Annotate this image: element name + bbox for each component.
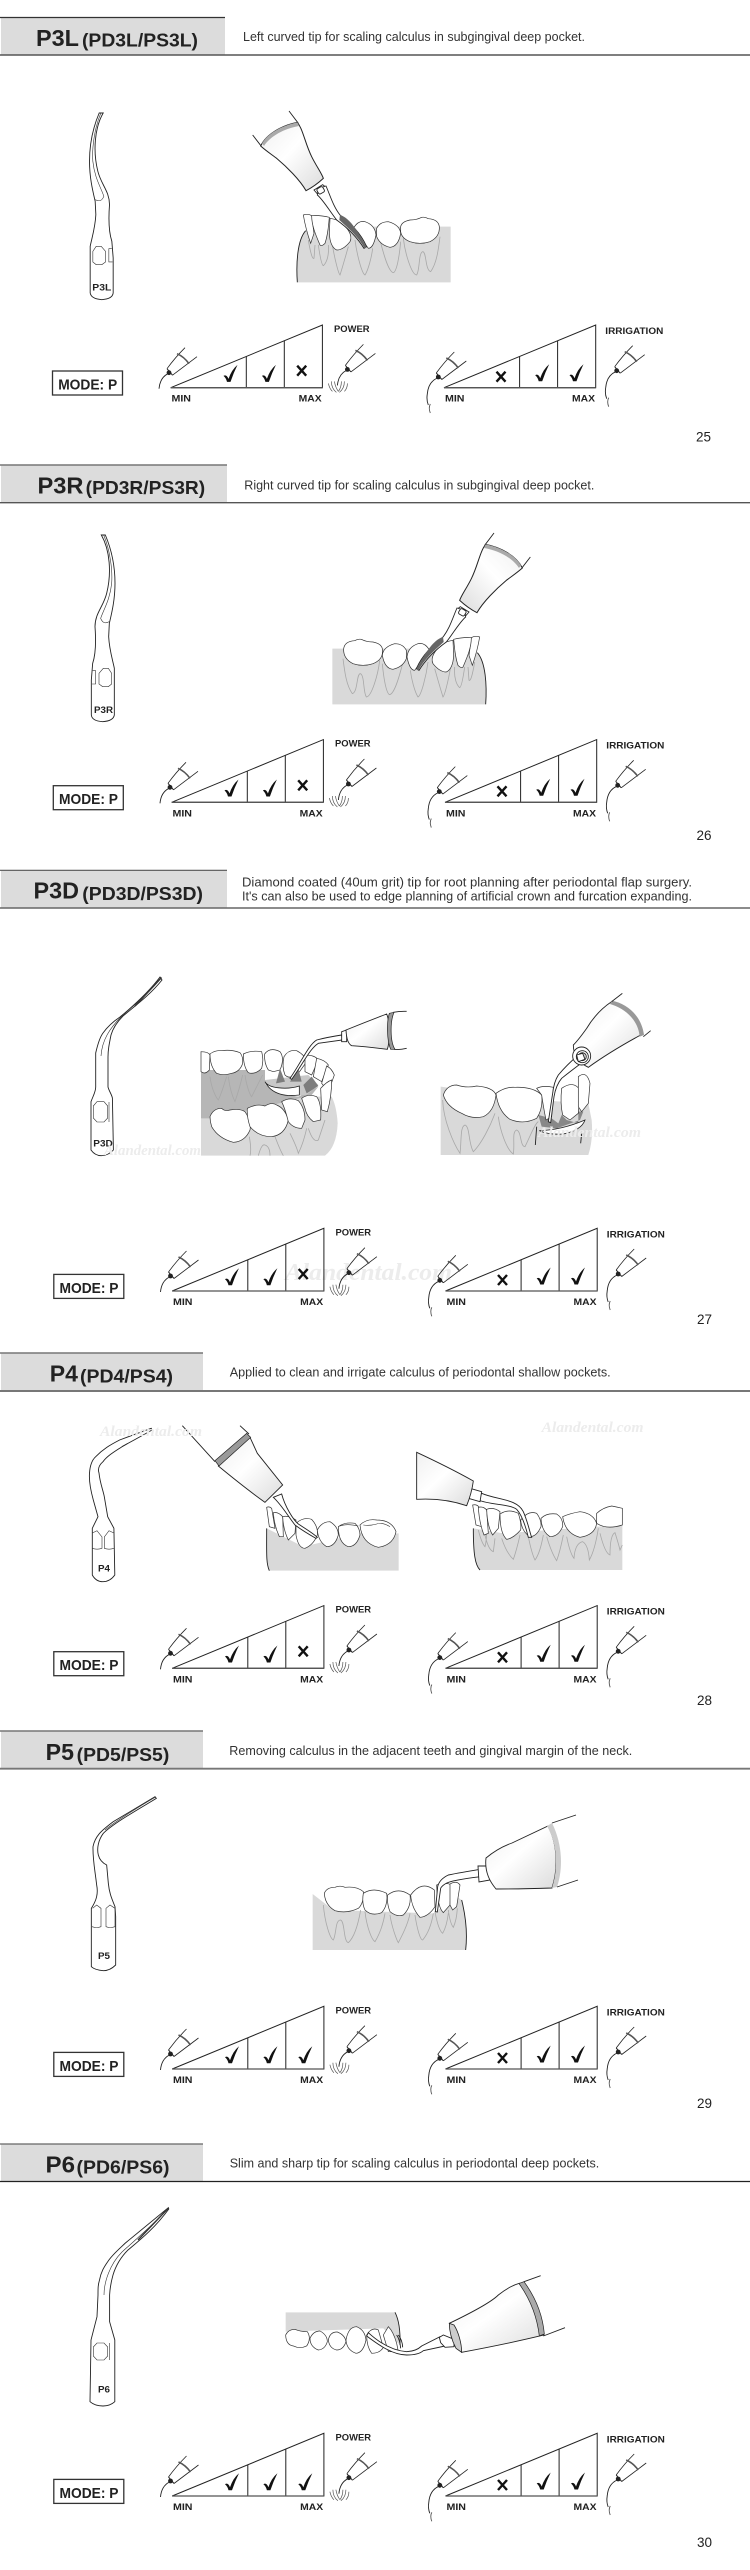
description: P3D: Diamond coated (40um grit) tip for root planning after periodontal flap surgery. <box>242 875 692 890</box>
power meter <box>160 1605 377 1685</box>
watermarks: Alandental.com <box>537 1125 641 1141</box>
header bar: P5: (PD5/PS5) <box>77 1744 169 1765</box>
power meter <box>159 324 375 405</box>
page number: 28 <box>697 1693 712 1708</box>
page number: 30 <box>697 2535 712 2550</box>
power meter: MIN <box>173 1674 193 1685</box>
irrigation meter: MIN <box>446 1297 466 1308</box>
tip drawing: P3D: P3D <box>93 1139 113 1149</box>
header bar: P4: (PD4/PS4) <box>80 1366 173 1386</box>
power meter: MAX <box>300 808 323 820</box>
irrigation meter: MAX <box>573 808 597 820</box>
power meter: MAX <box>300 2075 324 2086</box>
watermarks <box>99 1420 644 1440</box>
tip drawing: P3L <box>90 113 113 300</box>
description: P5: Removing calculus in the adjacent teeth and gingival margin of the neck. <box>229 1743 632 1758</box>
irrigation meter <box>428 2006 665 2094</box>
tip drawing: P6: P6 <box>98 2384 110 2394</box>
power meter: MIN <box>172 808 192 820</box>
irrigation meter <box>428 1606 665 1694</box>
header bar: P3R: P3R <box>38 472 84 498</box>
section: P3R <box>0 465 750 843</box>
tip drawing: P3R <box>91 535 115 722</box>
section: P5 <box>0 1731 750 2111</box>
power meter: MAX <box>300 1674 324 1685</box>
page number: 26 <box>696 828 712 843</box>
illustration: side handpiece with teeth <box>417 1452 622 1570</box>
page number: 27 <box>697 1312 712 1327</box>
irrigation meter <box>428 1228 665 1316</box>
power meter: MIN <box>172 394 191 405</box>
power meter <box>160 2005 377 2086</box>
description: P4: Applied to clean and irrigate calculus of periodontal shallow pockets. <box>230 1365 611 1380</box>
mode label <box>54 2052 124 2076</box>
mode label: MODE: P <box>60 2485 118 2502</box>
description: P3D <box>242 875 692 904</box>
irrigation meter: IRRIGATION <box>605 326 663 337</box>
irrigation meter: IRRIGATION <box>607 2007 665 2018</box>
mode label: MODE: P <box>60 1657 118 1674</box>
illustration: handpiece at gingival margin <box>313 1815 578 1950</box>
header bar: P5 <box>0 1731 750 1769</box>
irrigation meter: MIN <box>446 1674 466 1685</box>
irrigation meter: IRRIGATION <box>606 741 664 752</box>
power meter <box>160 1227 377 1308</box>
illustration: handpiece scaling left side <box>253 111 451 282</box>
header bar: P3R <box>0 465 750 503</box>
tip drawing: P6 <box>90 2208 169 2406</box>
tip drawing: P4: P4 <box>98 1564 110 1574</box>
section: P6 <box>0 2144 750 2550</box>
header bar: P3R: (PD3R/PS3R) <box>86 477 205 498</box>
irrigation meter: MIN <box>446 808 466 820</box>
irrigation meter: MAX <box>574 2502 597 2513</box>
power meter: MIN <box>173 1297 193 1308</box>
description: P6: Slim and sharp tip for scaling calculus in periodontal deep pockets. <box>230 2155 599 2170</box>
page number: 25 <box>696 430 711 445</box>
illustration: upper teeth with handpiece <box>286 2276 565 2355</box>
header bar: P6: P6 <box>46 2152 75 2178</box>
illustration: occlusal view with handpiece <box>201 1011 407 1156</box>
mode label <box>53 786 123 810</box>
header bar: P3D <box>0 870 750 908</box>
tip drawing: P5 <box>91 1797 156 1971</box>
mode label <box>54 1652 124 1676</box>
irrigation meter: IRRIGATION <box>607 2434 665 2445</box>
header bar: P3D: (PD3D/PS3D) <box>82 883 203 904</box>
irrigation meter: IRRIGATION <box>607 1229 665 1240</box>
header bar: P6 <box>0 2144 750 2182</box>
description: P3R: Right curved tip for scaling calculus in subgingival deep pocket. <box>244 477 594 492</box>
irrigation meter <box>427 325 663 413</box>
description: P3L: Left curved tip for scaling calculus in subgingival deep pocket. <box>243 29 585 44</box>
tip drawing: P4 <box>89 1428 152 1582</box>
mode label: MODE: P <box>58 376 117 394</box>
header bar: P3D: P3D <box>34 877 79 903</box>
mode label: MODE: P <box>60 2058 118 2075</box>
irrigation meter: MIN <box>446 2075 466 2086</box>
irrigation meter: MAX <box>572 394 596 405</box>
header bar: P6: (PD6/PS6) <box>76 2156 170 2178</box>
tip drawing: P5: P5 <box>98 1951 110 1961</box>
power meter <box>160 2432 377 2513</box>
irrigation meter: MAX <box>574 2075 597 2086</box>
tip drawing: P3R: P3R <box>94 705 114 715</box>
illustration: front handpiece with teeth <box>182 1426 399 1571</box>
irrigation meter: MIN <box>445 394 465 405</box>
watermarks: Alandental.com <box>283 1260 452 1286</box>
power meter: POWER <box>336 2432 371 2443</box>
power meter: POWER <box>336 1605 371 1616</box>
irrigation meter: MIN <box>446 2502 466 2513</box>
irrigation meter: MAX <box>574 1297 597 1308</box>
illustration: buccal view with handpiece <box>441 993 651 1155</box>
power meter: POWER <box>336 2005 371 2016</box>
power meter: POWER <box>335 739 371 750</box>
header bar: P3L <box>0 17 750 55</box>
section: P3L <box>0 17 750 445</box>
mode label: MODE: P <box>60 1280 118 1297</box>
mode label: MODE: P <box>59 791 118 808</box>
watermarks: Alandental.com <box>99 1424 202 1440</box>
description: P3D: It's can also be used to edge planning of artificial crown and furcation expanding. <box>242 889 692 904</box>
section: P4 <box>0 1353 750 1708</box>
irrigation meter <box>428 2433 665 2521</box>
header bar: P4: P4 <box>50 1361 78 1387</box>
watermarks: Alandental.com <box>541 1420 644 1436</box>
mode label <box>54 2479 124 2503</box>
power meter: MIN <box>173 2502 193 2513</box>
mode label <box>54 1274 124 1298</box>
header bar: P3L: P3L <box>36 25 79 51</box>
power meter: POWER <box>336 1227 371 1238</box>
header bar: P3L: (PD3L/PS3L) <box>82 30 198 50</box>
power meter: MAX <box>300 1297 324 1308</box>
illustration: handpiece scaling right side <box>332 533 530 704</box>
power meter: POWER <box>334 324 370 335</box>
power meter: MAX <box>299 394 322 405</box>
mode label <box>52 371 122 395</box>
watermarks <box>103 1125 641 1286</box>
section: P3D <box>0 870 750 1327</box>
power meter <box>160 739 376 820</box>
irrigation meter: IRRIGATION <box>607 1607 665 1618</box>
header bar: P4 <box>0 1353 750 1391</box>
page number: 29 <box>697 2096 712 2111</box>
irrigation meter: MAX <box>574 1674 597 1685</box>
header bar: P5: P5 <box>46 1739 74 1765</box>
watermarks: Alandental.com <box>103 1143 201 1159</box>
tip drawing: P3D <box>91 977 162 1156</box>
power meter: MAX <box>300 2502 324 2513</box>
power meter: MIN <box>173 2075 193 2086</box>
tip drawing: P3L: P3L <box>92 282 112 292</box>
irrigation meter <box>428 740 664 828</box>
